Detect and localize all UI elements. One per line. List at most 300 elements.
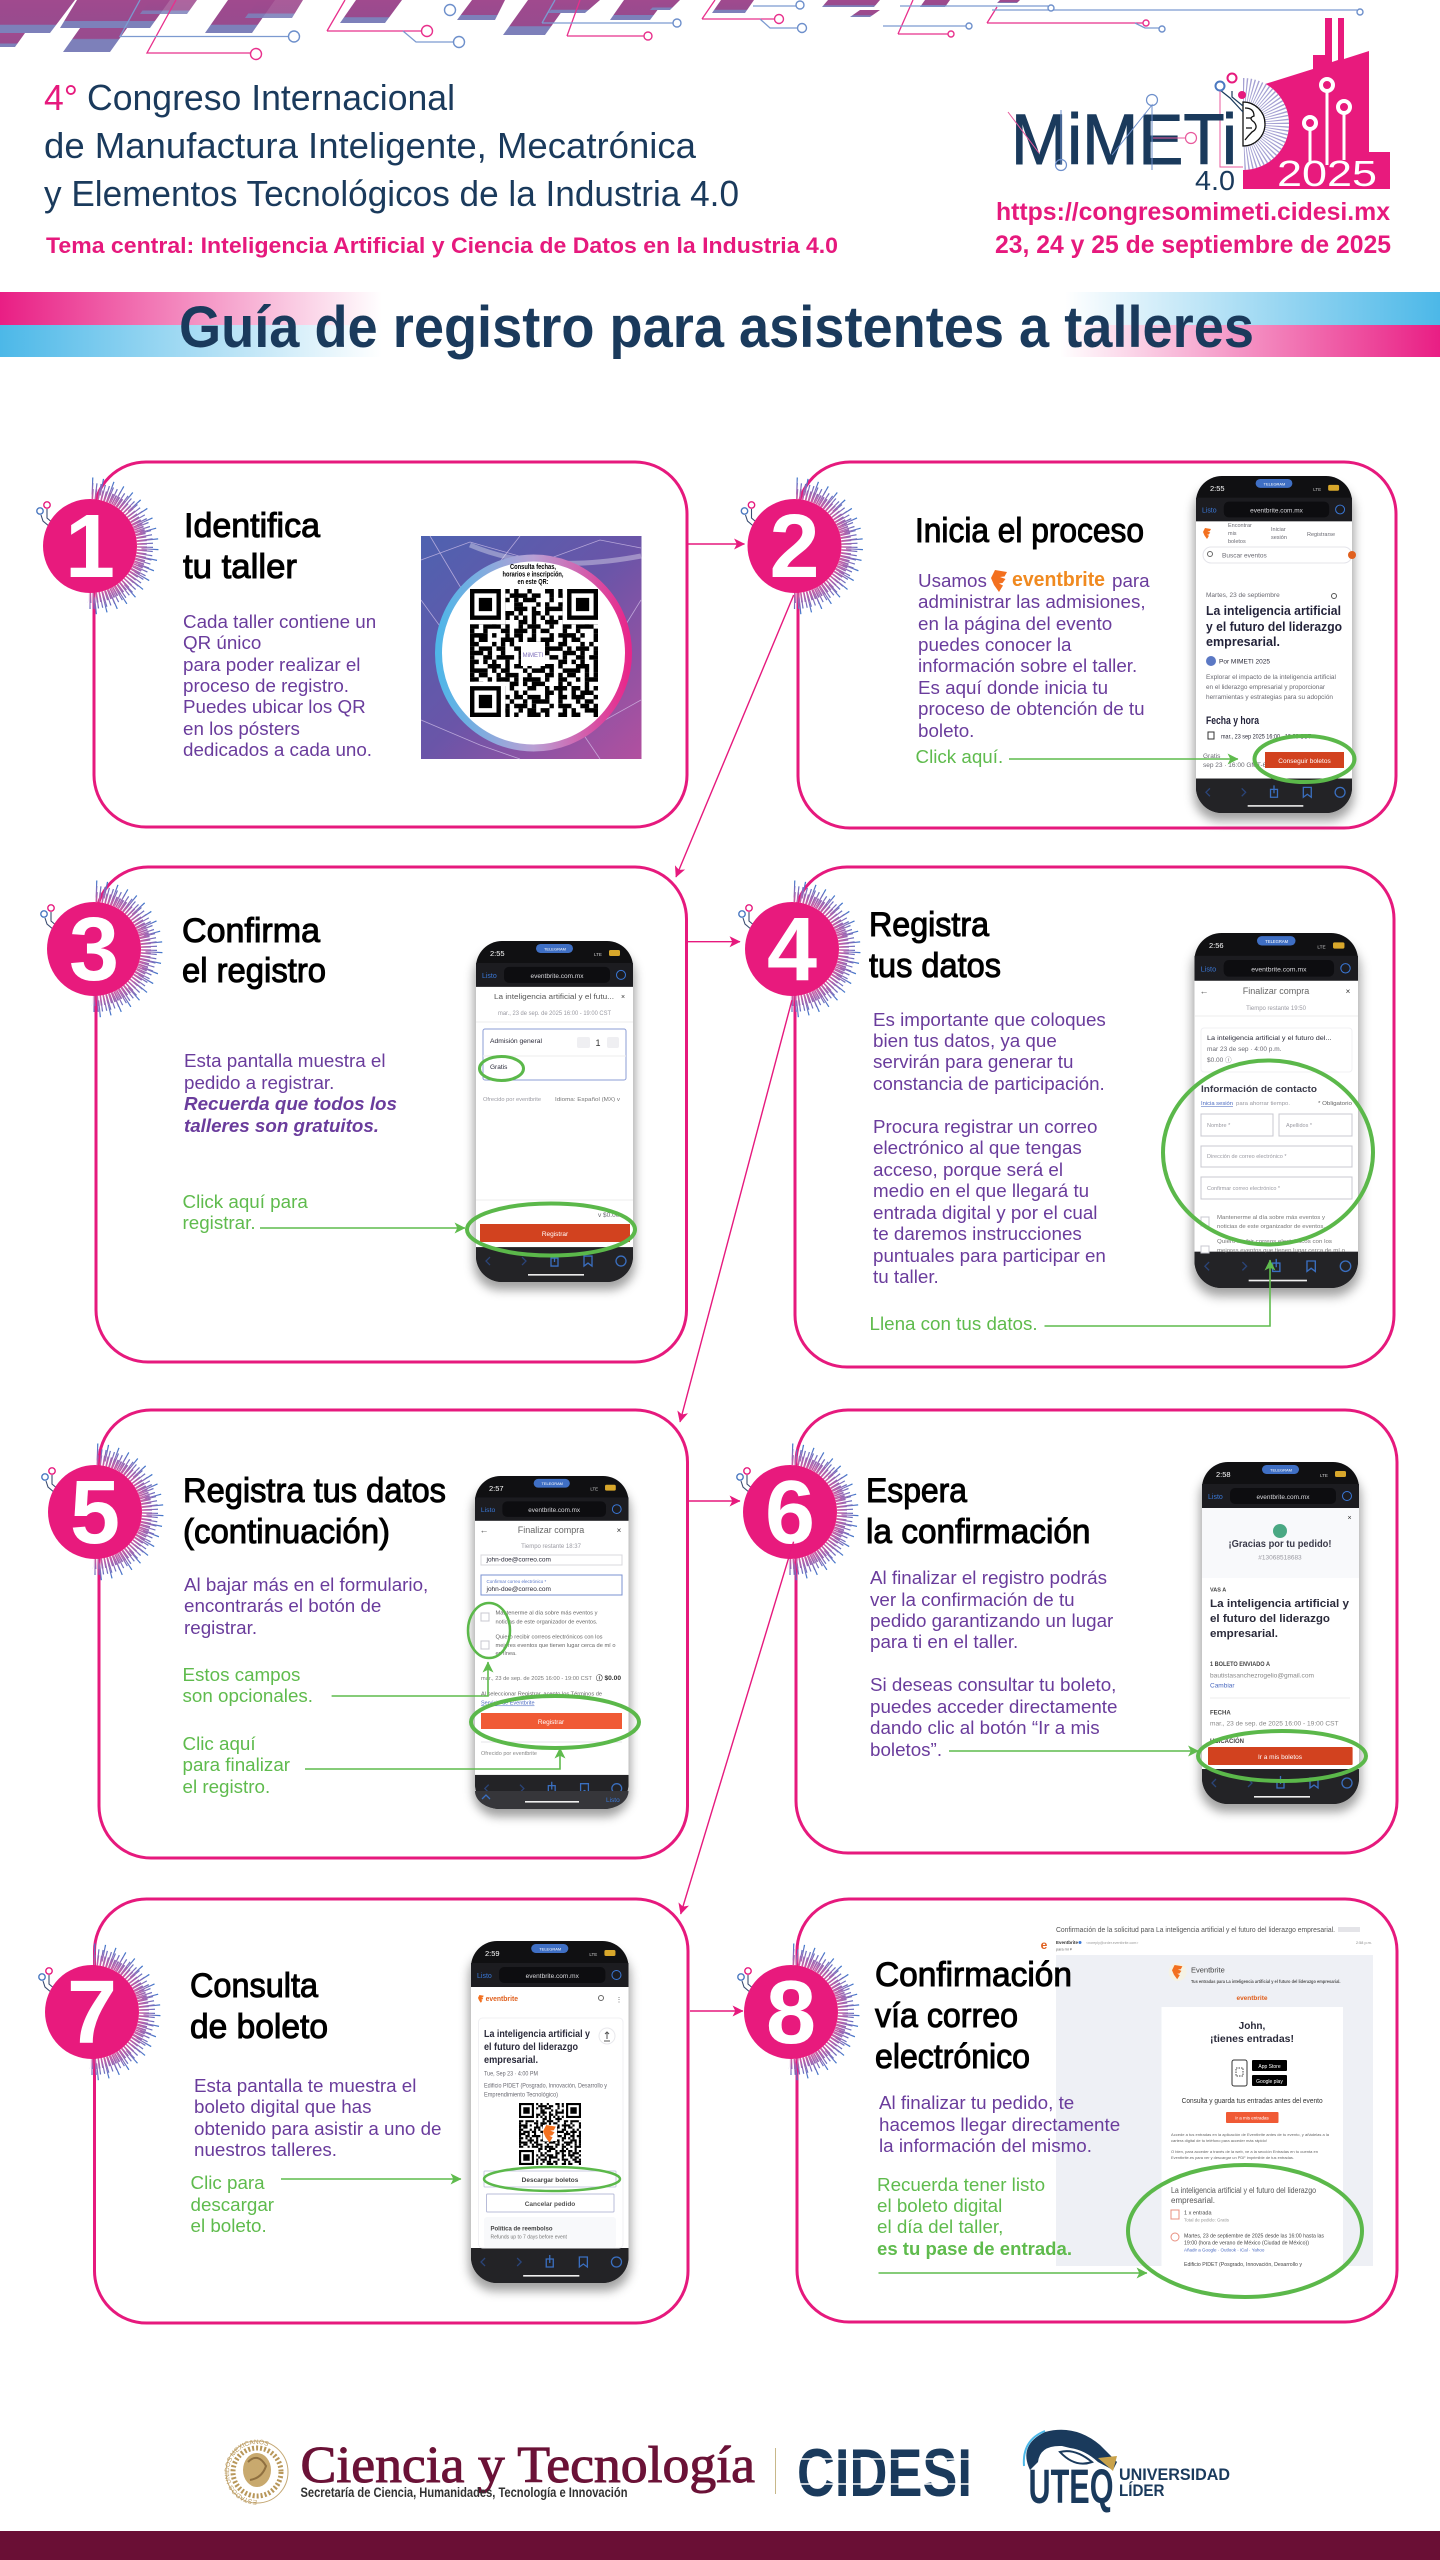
text: step 4 description: entrada digital y por el cual (873, 1202, 1097, 1223)
arrow to email (878, 2272, 1147, 2274)
heading: Espera la confirmación: Espera (866, 1472, 967, 1510)
heading: Consulta de boleto (190, 1967, 328, 2046)
phone screenshot: form continued: mar., 23 de sep. de 2025 16:00 - 19:00 CST (481, 1676, 593, 1682)
text: step 4 description: Procura registrar un correo (873, 1116, 1097, 1137)
text: step 7 description: Esta pantalla te muestra el (194, 2075, 416, 2096)
text: step 7 description (194, 2075, 441, 2160)
phone screenshot: digital ticket: eventbrite (486, 1996, 518, 2003)
step number 5: 5 (70, 1463, 120, 1563)
email screenshot: Martes, 23 de septiembre de 2025 desde las 16:00 hasta las (1184, 2234, 1324, 2240)
phone screenshot: contact form: para ahorrar tiempo. (1236, 1101, 1290, 1107)
email screenshot: 1 x entrada (1184, 2210, 1212, 2216)
text: step 5 description: registrar. (184, 1617, 257, 1638)
QR poster (421, 536, 642, 759)
phone screenshot: form continued: Confirmar correo electrónico * (486, 1579, 547, 1584)
text: step 6 description: dando clic al botón “Ir a mis (870, 1717, 1100, 1738)
phone screenshot: contact form: Información de contacto (1201, 1084, 1317, 1095)
email screenshot: Eventbrite (1191, 1966, 1225, 1974)
step number 5 (42, 1452, 155, 1572)
phone screenshot: ticket selection: Ofrecido por eventbrite (483, 1097, 541, 1103)
text: step 1 description: en los pósters (183, 718, 300, 739)
email screenshot: Tus entradas para La inteligencia artificial y el futuro del liderazgo empresarial. (1191, 1979, 1340, 1984)
text: step 6 description: puedes acceder directamente (870, 1696, 1117, 1717)
text: step 4 description: Es importante que coloques (873, 1009, 1106, 1030)
step number 6: 6 (765, 1463, 815, 1563)
callout: Recuerda tener listo el boleto: Recuerda tener listo (877, 2174, 1045, 2195)
phone screenshot: digital ticket: ⋮ (616, 1997, 622, 2004)
email screenshot: 19:00 (hora de verano de México (Ciudad de México)) (1184, 2240, 1309, 2246)
phone screenshot: form continued: Quiero recibir correos electrónicos con los (496, 1634, 603, 1640)
phone screenshot: contact form: Dirección de correo electrónico * (1207, 1154, 1287, 1160)
phone screenshot: order confirmation (1200, 1462, 1361, 1812)
text: step 2 description: en la página del evento (918, 613, 1112, 634)
heading: Confirmación vía correo electrónico (875, 1956, 1072, 2076)
logo: MiMETI 4.0 2025: 2025 (1277, 153, 1377, 194)
heading: Identifica tu taller: Identifica (184, 507, 320, 545)
phone screenshot: contact form: Mantenerme al día sobre más eventos y (1217, 1215, 1325, 1221)
congress title: y Elementos Tecnológicos de la Industria 4.0 (44, 173, 739, 214)
phone screenshot: ticket selection: 1 (595, 1038, 601, 1048)
phone screenshot: form continued: en línea. (496, 1651, 517, 1657)
callout: Clic para descargar el boleto: descargar (190, 2194, 274, 2215)
callout: Llena con tus datos (870, 1260, 1270, 1334)
text: step 6 description: para ti en el taller. (870, 1631, 1018, 1652)
panel: step 7 (39, 1899, 688, 2323)
heading: Confirmación vía correo electrónico: vía correo (875, 1997, 1018, 2035)
heading: Consulta de boleto: de boleto (190, 2008, 328, 2046)
logo: UTEQ Universidad Líder: LÍDER (1119, 2481, 1164, 2500)
text: step 1 description: proceso de registro. (183, 675, 349, 696)
phone screenshot: digital ticket: Refunds up to 7 days before event (490, 2234, 568, 2240)
phone screenshot: order confirmation: bautistasanchezrogelio@gmail.com (1210, 1674, 1314, 1680)
phone screenshot: digital ticket: La inteligencia artificial y (484, 2028, 590, 2040)
phone screenshot: digital ticket: 2:59 (485, 1949, 500, 1958)
text: step 7 description: nuestros talleres. (194, 2139, 337, 2160)
callout: Clic aquí para finalizar el registro (182, 1733, 560, 1797)
phone screenshot: ticket selection: × (621, 994, 625, 1001)
phone screenshot: order confirmation: La inteligencia artificial y (1210, 1598, 1350, 1610)
phone screenshot: contact form: Inicia sesión (1201, 1101, 1233, 1107)
phone screenshot: order confirmation: 1 BOLETO ENVIADO A (1210, 1662, 1271, 1668)
highlight ellipse (484, 2167, 620, 2191)
text: step 1 description: Cada taller contiene un (183, 611, 376, 632)
phone screenshot: contact form: La inteligencia artificial y el futuro del... (1207, 1035, 1332, 1042)
panel: step 4 (739, 867, 1394, 1367)
heading: Registra tus datos (continuación): Registra tus datos (183, 1472, 446, 1510)
text: step 7 description: boleto digital que has (194, 2096, 372, 2117)
phone screenshot: event page: en el liderazgo empresarial y proporcionar (1206, 684, 1326, 691)
callout: Click aquí: Click aquí. (916, 746, 1003, 767)
phone screenshot: ticket selection: Idioma: Español (MX) v (555, 1097, 620, 1103)
phone screenshot: event page: 2:55 (1210, 484, 1225, 493)
phone screenshot: event page: sep 23 · 16:00 GMT-6 (1203, 762, 1267, 769)
phone screenshot: form continued: 2:57 (489, 1484, 504, 1493)
text: step 2 description: eventbrite (1012, 569, 1105, 591)
callout: Estos campos son opcionales: son opcionales. (182, 1685, 313, 1706)
logo: UTEQ Universidad Líder: UTEQ (1028, 2461, 1114, 2514)
callout: Recuerda tener listo el boleto (877, 2174, 1072, 2259)
phone screenshot: order confirmation: ¡Gracias por tu pedido! (1228, 1539, 1332, 1550)
arrow to button (949, 1750, 1198, 1752)
panel: step 1 (37, 462, 687, 827)
text: step 6 description: Al finalizar el registro podrás (870, 1567, 1107, 1588)
step number 6 (737, 1452, 850, 1572)
step number 1: 1 (65, 497, 115, 597)
phone screenshot: contact form: Nombre * (1207, 1123, 1231, 1129)
email screenshot: 2:58 p.m. (1356, 1941, 1372, 1945)
phone screenshot: form continued: mejores eventos que tienen lugar cerca de mí o (496, 1643, 616, 1649)
phone screenshot: form continued: Tiempo restante 18:37 (521, 1544, 582, 1550)
highlight ellipse (1254, 736, 1354, 782)
phone screenshot: digital ticket: Edificio PIDET (Posgrado, Innovación, Desarrollo y (484, 2082, 608, 2090)
heading: Registra tus datos (continuación): (continuación) (183, 1513, 390, 1551)
email screenshot: cartera digital de tu teléfono para acceder más rápido! (1171, 2138, 1267, 2143)
phone screenshot: form continued: × (617, 1526, 622, 1535)
phone screenshot: order confirmation: #13068518683 (1258, 1554, 1302, 1562)
text: step 4 description: medio en el que llegará tu (873, 1180, 1089, 1201)
header circuit decoration (0, 0, 1363, 60)
text: step 3 description: pedido a registrar. (184, 1072, 334, 1093)
logo: Ciencia y Tecnología: Secretaría de Ciencia, Humanidades, Tecnología e Innovación (300, 2484, 628, 2500)
central theme: Tema central: Inteligencia Artificial y Ciencia de Datos en la Industria 4.0 (46, 233, 838, 258)
text: step 6 description: pedido garantizando un lugar (870, 1610, 1113, 1631)
icon: eventbrite flame (991, 570, 1007, 592)
text: step 1 description (183, 611, 376, 760)
step number 2: 2 (769, 497, 820, 597)
text: step 6 description: ver la confirmación de tu (870, 1589, 1075, 1610)
phone screenshot: event page: Encontrar (1228, 523, 1252, 529)
phone screenshot: digital ticket: Emprendimiento Tecnológico) (484, 2092, 558, 2098)
heading: Registra tus datos: tus datos (869, 947, 1001, 985)
heading: Espera la confirmación (866, 1472, 1090, 1551)
text: step 6 description: boletos”. (870, 1739, 942, 1760)
highlight ellipses (467, 1056, 635, 1256)
text: step 7 description: obtenido para asistir a uno de (194, 2118, 441, 2139)
step number 3 (41, 889, 154, 1009)
phone screenshot: form continued: Servicio de Eventbrite (481, 1700, 534, 1706)
phone screenshot: order confirmation: Ir a mis boletos (1258, 1754, 1303, 1761)
congress title: Congreso Internacional (87, 77, 455, 118)
text: step 4 description: te daremos instrucciones (873, 1223, 1082, 1244)
QR poster: Consulta fechas, (510, 562, 556, 571)
callout: Clic aquí para finalizar el registro: Clic aquí (182, 1733, 256, 1754)
phone screenshot: contact form: * Obligatorio (1318, 1101, 1352, 1107)
phone screenshot: event page: boletos (1228, 539, 1246, 545)
logo: CIDESI: CIDESI (797, 2435, 972, 2511)
panel: step 6 (737, 1410, 1397, 1853)
panel: step 3 (41, 867, 687, 1362)
callout: Clic para descargar el boleto: el boleto. (190, 2215, 267, 2236)
step number 3: 3 (69, 900, 119, 1000)
phone screenshot: contact form: noticias de este organizador de eventos. (1217, 1224, 1326, 1230)
phone screenshot: form continued: ⓘ $0.00 (596, 1673, 621, 1682)
text: step 8 description (879, 2092, 1120, 2156)
callout: Click aquí para registrar: registrar. (182, 1212, 256, 1233)
phone screenshot: order confirmation: VAS A (1210, 1588, 1226, 1594)
phone screenshot: event page (1194, 476, 1356, 821)
email screenshot: Edificio PIDET (Posgrado, Innovación, Desarrollo y (1184, 2262, 1302, 2268)
email screenshot: Google play (1256, 2079, 1283, 2085)
phone screenshot: order confirmation: × (1347, 1515, 1352, 1522)
phone screenshot: form continued: Ofrecido por eventbrite (481, 1751, 537, 1757)
phone screenshot: ticket selection (474, 941, 635, 1290)
email screenshot: La inteligencia artificial y el futuro del liderazgo (1171, 2186, 1316, 2195)
text: step 1 description: QR único (183, 632, 261, 653)
callout: Llena con tus datos: Llena con tus datos. (870, 1313, 1038, 1334)
highlight ellipses (468, 1603, 639, 1748)
text: step 2 description: boleto. (918, 720, 974, 741)
phone screenshot: digital ticket: el futuro del liderazgo (484, 2041, 578, 2053)
step number 2 (741, 486, 855, 606)
phone screenshot: order confirmation: mar., 23 de sep. de 2025 16:00 - 19:00 CST (1210, 1722, 1339, 1728)
logo: Ciencia y Tecnología: Ciencia y Tecnología (300, 2437, 755, 2494)
phone screenshot: digital ticket (469, 1941, 631, 2291)
callout: Recuerda tener listo el boleto: el día del taller, (877, 2216, 1003, 2237)
callout: Clic para descargar el boleto: Clic para (190, 2172, 265, 2193)
phone screenshot: contact form: × (1346, 987, 1351, 996)
phone screenshot: contact form: ← (1200, 986, 1208, 996)
heading: Identifica tu taller: tu taller (183, 548, 297, 586)
phone screenshot: event page: Gratis (1203, 753, 1221, 760)
email screenshot: App Store (1258, 2064, 1281, 2070)
text: step 4 description: puntuales para participar en (873, 1245, 1106, 1266)
heading: Registra tus datos (continuación) (183, 1472, 446, 1551)
text: step 4 description (873, 1009, 1106, 1287)
phone screenshot: form continued: Al seleccionar Registrar, acepto los Términos de (481, 1692, 602, 1698)
phone screenshot: contact form: $0.00 ⓘ (1207, 1056, 1232, 1064)
phone screenshot: order confirmation: Cambiar (1210, 1682, 1235, 1690)
heading: Confirmación vía correo electrónico: electrónico (875, 2038, 1030, 2076)
phone screenshot: form continued: john-doe@correo.com (486, 1556, 551, 1564)
step number 7: 7 (67, 1963, 117, 2063)
text: step 2 description: Es aquí donde inicia tu (918, 677, 1108, 698)
phone screenshot: contact form: 2:56 (1209, 941, 1224, 950)
text: step 4 description: electrónico al que tengas (873, 1137, 1082, 1158)
callout: Click aquí para registrar (182, 1191, 465, 1233)
text: step 6 description: Si deseas consultar tu boleto, (870, 1674, 1116, 1695)
text: step 8 description: la información del mismo. (879, 2135, 1092, 2156)
email screenshot: Eventbrite.es para ver y descargar un PDF imprimible de tus entradas. (1171, 2155, 1294, 2160)
text: step 5 description: Al bajar más en el formulario, (184, 1574, 428, 1595)
phone screenshot: ticket selection: La inteligencia artificial y el futu... (494, 992, 614, 1001)
text: step 2 description: para (1112, 570, 1150, 591)
phone screenshot: digital ticket: Tue, Sep 23 · 4:00 PM (484, 2070, 538, 2078)
QR poster: en este QR: (518, 577, 548, 586)
heading: Confirma el registro: Confirma (182, 912, 320, 950)
text: step 5 description: encontrarás el botón de (184, 1595, 381, 1616)
text: step 4 description: servirán para generar tu (873, 1051, 1073, 1072)
phone screenshot: digital ticket: empresarial. (484, 2054, 538, 2066)
step number 8: 8 (766, 1963, 816, 2063)
phone screenshot: event page: Conseguir boletos (1278, 758, 1331, 765)
website and dates: 23, 24 y 25 de septiembre de 2025 (995, 231, 1391, 259)
phone screenshot: ticket selection: Gratis (490, 1064, 508, 1071)
text: step 3 description: talleres son gratuitos. (184, 1115, 379, 1136)
heading: Registra tus datos: Registra (869, 906, 989, 944)
email screenshot: empresarial. (1171, 2196, 1215, 2205)
text: step 2 description (918, 569, 1150, 741)
email screenshot: para mí ▾ (1056, 1948, 1072, 1952)
text: step 4 description: acceso, porque será el (873, 1159, 1063, 1180)
logo: MiMETI 4.0 2025 (1008, 18, 1390, 196)
phone screenshot: event page: mar., 23 sep 2025 16:00 - 19:00 CST (1221, 734, 1311, 740)
phone screenshot: order confirmation: UBICACIÓN (1210, 1737, 1244, 1745)
email screenshot: Consulta y guarda tus entradas antes del evento (1182, 2098, 1323, 2105)
callout: Clic aquí para finalizar el registro: el registro. (182, 1776, 270, 1797)
email screenshot: Total de pedido: Gratis (1184, 2218, 1230, 2222)
callout: Recuerda tener listo el boleto: es tu pase de entrada. (877, 2238, 1072, 2259)
email screenshot: John, (1239, 2021, 1266, 2032)
phone screenshot: order confirmation: 2:58 (1216, 1470, 1231, 1479)
step number 4: 4 (767, 900, 817, 1000)
step number 1 (37, 486, 150, 606)
email screenshot (1041, 1925, 1373, 2268)
arrows between steps (676, 544, 794, 2011)
congress title: 4° (44, 77, 78, 118)
text: step 4 description: bien tus datos, ya que (873, 1030, 1057, 1051)
phone screenshot: form continued: Mantenerme al día sobre más eventos y (496, 1610, 598, 1616)
email screenshot: eventbrite (1236, 1995, 1268, 2002)
website and dates: https://congresomimeti.cidesi.mx (996, 198, 1390, 226)
phone screenshot: ticket selection: mar., 23 de sep. de 2025 16:00 - 19:00 CST (498, 1011, 611, 1017)
phone screenshot: contact form: Tiempo restante 19:50 (1246, 1006, 1307, 1012)
phone screenshot: form continued: Finalizar compra (518, 1525, 584, 1535)
heading: Consulta de boleto: Consulta (190, 1967, 318, 2005)
heading: Espera la confirmación: la confirmación (866, 1513, 1090, 1551)
phone screenshot: event page: Explorar el impacto de la inteligencia artificial (1206, 674, 1337, 681)
phone screenshot: ticket selection: 2:55 (490, 949, 505, 958)
text: step 8 description: hacemos llegar directamente (879, 2114, 1120, 2135)
phone screenshot: form continued: noticias de este organizador de eventos. (496, 1620, 598, 1626)
step number 7 (39, 1952, 152, 2072)
phone screenshot: ticket selection: Admisión general (490, 1038, 543, 1045)
QR poster: horarios e inscripción, (502, 570, 564, 578)
phone screenshot: event page: Buscar eventos (1222, 552, 1268, 560)
logo: MiMETI 4.0 2025: 4.0 (1195, 165, 1235, 196)
panel: step 2 (741, 462, 1396, 828)
text: step 5 description (184, 1574, 428, 1638)
phone screenshot: order confirmation: el futuro del liderazgo (1210, 1613, 1330, 1625)
text: step 2 description: información sobre el taller. (918, 655, 1137, 676)
phone screenshot: contact form: mar 23 de sep · 4:00 p.m. (1207, 1046, 1282, 1053)
phone screenshot: digital ticket: Cancelar pedido (525, 2201, 575, 2208)
text: step 1 description: dedicados a cada uno. (183, 739, 372, 760)
phone screenshot: digital ticket: Descargar boletos (522, 2177, 579, 2184)
phone screenshot: digital ticket: Política de reembolso (490, 2226, 553, 2232)
phone screenshot: form continued: Registrar (538, 1719, 565, 1726)
phone screenshot: form continued: Listo (606, 1797, 620, 1804)
phone screenshot: event page: empresarial. (1206, 635, 1280, 649)
text: step 6 description (870, 1567, 1117, 1760)
text: step 2 description: administrar las admisiones, (918, 591, 1146, 612)
heading: Confirmación vía correo electrónico: Confirmación (875, 1956, 1072, 1994)
phone screenshot: ticket selection: Registrar (542, 1231, 569, 1238)
phone screenshot: contact form: Finalizar compra (1243, 986, 1309, 996)
callout: Click aquí para registrar: Click aquí para (182, 1191, 308, 1212)
phone screenshot: order confirmation: FECHA (1210, 1710, 1231, 1716)
callout: Recuerda tener listo el boleto: el boleto digital (877, 2195, 1002, 2216)
email screenshot: Accede a tus entradas en la aplicación de Eventbrite antes de tu evento, y añádelas a la (1171, 2132, 1330, 2137)
email screenshot: Eventbrite (1056, 1940, 1079, 1945)
text: step 2 description: proceso de obtención de tu (918, 698, 1145, 719)
email screenshot: e (1041, 1938, 1048, 1952)
phone screenshot: event page: Martes, 23 de septiembre (1206, 592, 1280, 599)
heading: Identifica tu taller (183, 507, 320, 586)
phone screenshot: contact form: Apellidos * (1286, 1123, 1313, 1129)
callout: Estos campos son opcionales: Estos campos (182, 1664, 300, 1685)
callout: Estos campos son opcionales (182, 1662, 488, 1706)
callout: Clic para descargar el boleto (190, 2172, 461, 2236)
panel: step 5 (42, 1410, 688, 1858)
highlight ellipse (1128, 2165, 1362, 2297)
phone screenshot: event page: Registrarse (1307, 532, 1335, 538)
email screenshot: Confirmación de la solicitud para La inteligencia artificial y el futuro del liderazgo empresarial. (1056, 1925, 1335, 1934)
phone screenshot: contact form: mejores eventos que tienen lugar cerca de mí o (1217, 1248, 1345, 1254)
logo: UTEQ Universidad Líder (1024, 2430, 1230, 2514)
phone screenshot: contact form: Confirmar correo electrónico * (1207, 1186, 1281, 1192)
phone screenshot: form continued: john-doe@correo.com (486, 1586, 551, 1593)
text: step 1 description: Puedes ubicar los QR (183, 696, 366, 717)
heading: Confirma el registro: el registro (182, 952, 326, 990)
text: step 3 description: Recuerda que todos los (184, 1093, 397, 1114)
text: step 2 description: puedes conocer la (918, 634, 1072, 655)
text: step 3 description: Esta pantalla muestra el (184, 1050, 386, 1071)
QR poster: MiMETI (523, 653, 544, 659)
heading: Inicia el proceso: Inicia el proceso (915, 512, 1144, 550)
phone screenshot: event page: mis (1228, 531, 1237, 537)
step number 4 (739, 889, 852, 1009)
panel: step 8 (738, 1899, 1397, 2322)
text: step 3 description (184, 1050, 397, 1136)
text: step 1 description: para poder realizar el (183, 654, 360, 675)
email screenshot: ¡tienes entradas! (1210, 2034, 1294, 2045)
congress title (44, 77, 739, 214)
phone screenshot: form continued (473, 1476, 630, 1817)
website and dates (995, 198, 1391, 259)
phone screenshot: event page: Iniciar (1271, 527, 1286, 533)
phone screenshot: event page: Fecha y hora (1206, 715, 1260, 727)
phone screenshot: ticket selection: v $0.00 (598, 1212, 620, 1219)
email screenshot: Ir a mis entradas (1235, 2116, 1270, 2120)
phone screenshot: contact form (1192, 933, 1360, 1296)
email screenshot: O bien, para acceder a través de la web, ve a la sección Entradas en tu cuenta en (1171, 2149, 1318, 2154)
heading: Confirma el registro (182, 912, 326, 990)
step number 8 (738, 1952, 851, 2072)
phone screenshot: event page: La inteligencia artificial (1206, 604, 1341, 618)
phone screenshot: event page: herramientas y estrategias para su adopción (1206, 694, 1333, 701)
footer bar (0, 2531, 1440, 2560)
email screenshot: Añadir a Google · Outlook · iCal · Yahoo (1184, 2248, 1265, 2252)
logo: UTEQ Universidad Líder: UNIVERSIDAD (1119, 2465, 1230, 2484)
highlight ellipse (1163, 1060, 1373, 1244)
logo: MiMETI 4.0 2025: MiMETi (1011, 101, 1237, 180)
text: step 8 description: Al finalizar tu pedido, te (879, 2092, 1074, 2113)
heading: Registra tus datos (869, 906, 1001, 985)
phone screenshot: event page: y el futuro del liderazgo (1206, 620, 1342, 634)
title band: Guía de registro para asistentes a talleres (179, 295, 1254, 360)
congress title: de Manufactura Inteligente, Mecatrónica (44, 125, 697, 166)
text: step 4 description: constancia de participación. (873, 1073, 1105, 1094)
logo divider (774, 2448, 776, 2494)
phone screenshot: event page: Por MIMETI 2025 (1219, 658, 1270, 666)
phone screenshot: event page: sesión (1271, 535, 1287, 541)
phone screenshot: form continued: ← (480, 1525, 488, 1535)
text: step 2 description: Usamos (918, 570, 987, 591)
text: step 4 description: tu taller. (873, 1266, 939, 1287)
callout: Clic aquí para finalizar el registro: para finalizar (182, 1754, 290, 1775)
phone screenshot: contact form: Quiero recibir correos electrónicos con los (1217, 1239, 1332, 1245)
logo: Ciencia y Tecnología: ESTADOS UNIDOS MEXICANOS (224, 2440, 269, 2504)
